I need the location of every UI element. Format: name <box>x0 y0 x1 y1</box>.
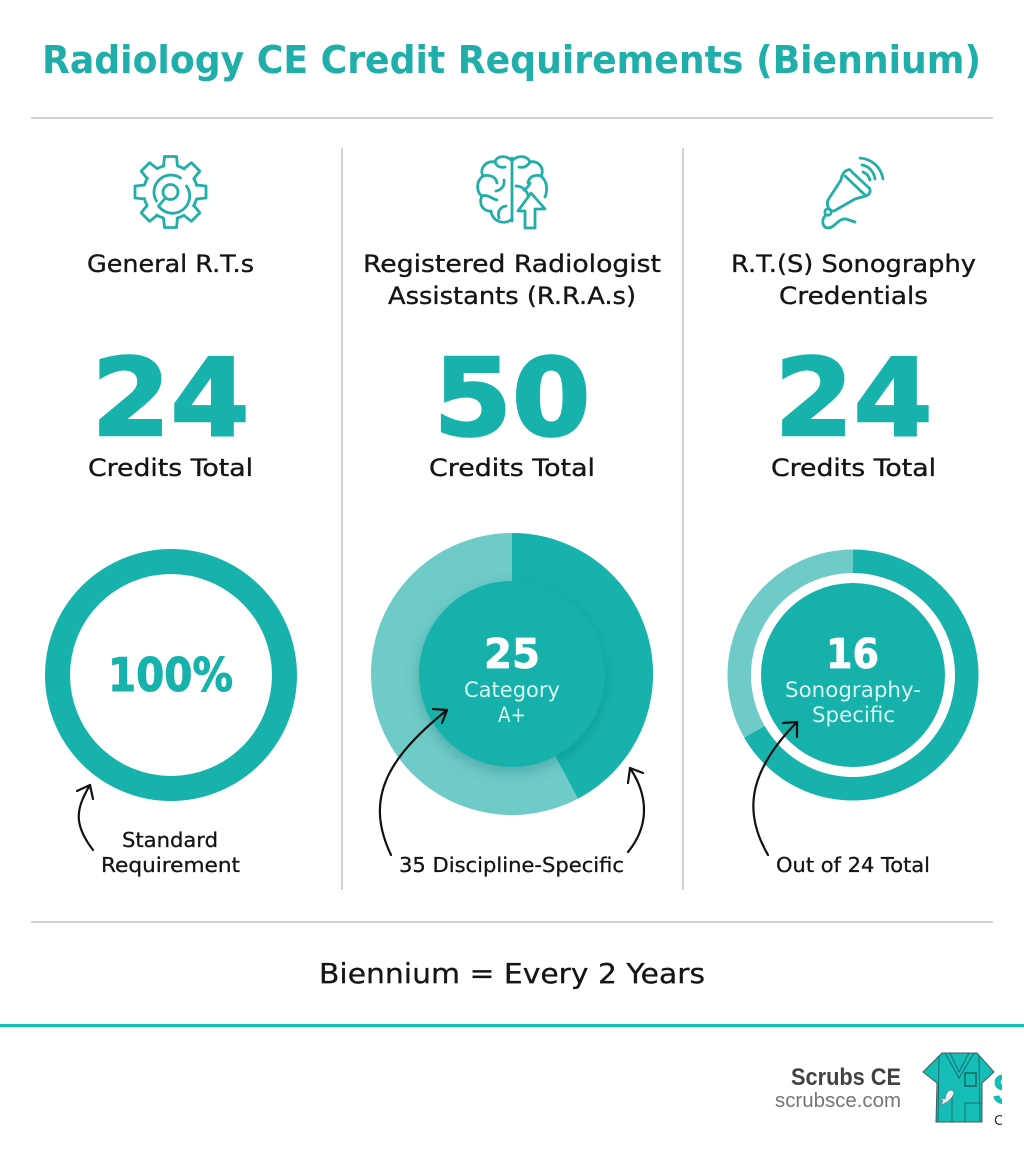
caption: out of 24 total: Out of 24 Total <box>776 853 930 877</box>
heading: Registered Radiologist Assistants: Registered Radiologist <box>363 250 661 278</box>
note: biennium definition: Biennium = Every 2 Years <box>319 957 705 990</box>
footer: scrubs logo: C <box>994 1112 1005 1129</box>
chart: donut 16 of 24 sonography-specific <box>728 550 978 800</box>
icon: brain with arrow <box>478 157 547 228</box>
heading: R.T.(S) Sonography Credentials: R.T.(S) Sonography <box>731 250 976 278</box>
caption: standard requirement: Requirement <box>101 853 240 877</box>
label: credits total: Credits Total <box>88 454 253 482</box>
footer: scrubs logo: S <box>992 1066 1021 1114</box>
heading: General R.T.s: General R.T.s <box>87 250 254 278</box>
number: 50 credits: 50 <box>434 337 590 461</box>
caption: 35 discipline-specific: 35 Discipline-Specific <box>399 853 624 877</box>
caption: standard requirement <box>101 828 240 877</box>
arrow: to outer ring <box>628 768 644 852</box>
chart: donut 35 discipline-specific, 25 category A+: 25 <box>484 630 540 678</box>
footer: brand name: scrubsce.com <box>775 1090 901 1112</box>
chart: donut 35 discipline-specific, 25 category A+: A+ <box>498 703 526 727</box>
footer: brand name <box>775 1064 901 1112</box>
chart: full ring 100%: 100% <box>108 648 233 702</box>
arrow: to centre <box>380 709 447 855</box>
chart: full ring 100% <box>58 562 284 788</box>
panel: R.T.(S) Sonography Credentials <box>728 158 978 877</box>
heading: Registered Radiologist Assistants <box>363 250 661 310</box>
title: Radiology CE Credit Requirements (Biennium) <box>42 38 981 82</box>
icon: ultrasound probe <box>823 158 883 228</box>
heading: R.T.(S) Sonography Credentials: Credentials <box>779 282 928 310</box>
chart: donut 35 discipline-specific, 25 category A+ <box>371 533 653 815</box>
chart: donut 16 of 24 sonography-specific: 16 <box>826 630 879 678</box>
label: credits total: Credits Total <box>429 454 595 482</box>
number: 24 credits: 24 <box>92 337 250 461</box>
number: 24 credits: 24 <box>774 337 932 461</box>
panel: General R.T.s <box>58 156 284 877</box>
label: credits total: Credits Total <box>771 454 936 482</box>
heading: Registered Radiologist Assistants: Assistants (R.R.A.s) <box>388 282 636 310</box>
chart: donut 16 of 24 sonography-specific: Sonography- <box>785 678 921 702</box>
footer: scrubs logo <box>923 1053 1024 1140</box>
panel: Registered Radiologist Assistants <box>363 157 661 877</box>
heading: R.T.(S) Sonography Credentials <box>731 250 976 310</box>
arrow: to centre <box>753 722 797 855</box>
footer: brand name: Scrubs CE <box>791 1064 901 1091</box>
caption: standard requirement: Standard <box>122 828 218 852</box>
chart: donut 35 discipline-specific, 25 category A+: Category <box>464 678 560 702</box>
icon: gear <box>135 156 206 228</box>
arrow: to ring <box>77 785 93 850</box>
chart: donut 16 of 24 sonography-specific: Specific <box>812 703 895 727</box>
